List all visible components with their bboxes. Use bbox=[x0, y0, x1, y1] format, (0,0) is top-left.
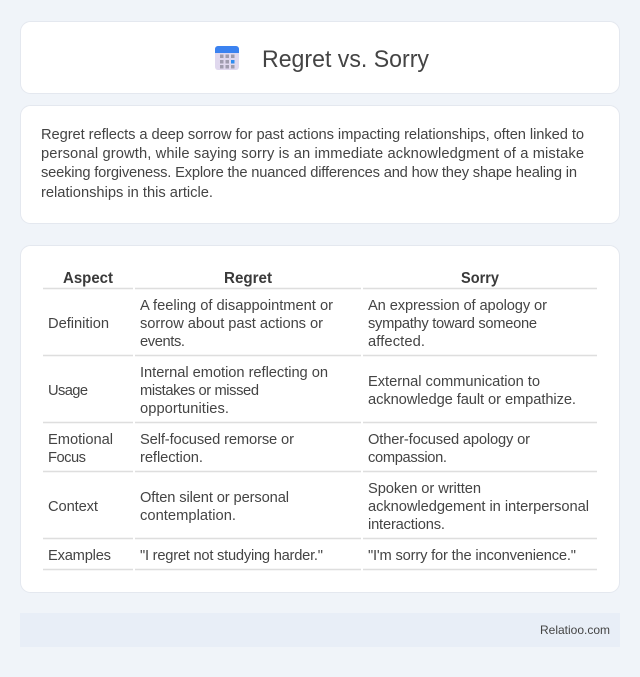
table row: definition: sympathy toward someone bbox=[368, 316, 537, 332]
table row: emotional focus: Focus bbox=[48, 450, 86, 466]
table row: context: interactions. bbox=[368, 517, 445, 533]
table row: definition: A feeling of disappointment or bbox=[140, 298, 333, 314]
table row: definition: sorrow about past actions or bbox=[140, 316, 323, 332]
table row: context: acknowledgement in interpersonal bbox=[368, 499, 589, 515]
table row: usage: opportunities. bbox=[140, 401, 229, 417]
table row: definition: Definition bbox=[48, 316, 109, 332]
panel: introduction bbox=[20, 106, 620, 224]
table row: context: Often silent or personal bbox=[140, 490, 289, 506]
table header row: Aspect bbox=[63, 270, 114, 287]
icon: calendar bbox=[215, 46, 239, 70]
table row: emotional focus: reflection. bbox=[140, 450, 203, 466]
text block: introduction bbox=[41, 127, 584, 201]
table row: definition: An expression of apology or bbox=[368, 298, 547, 314]
text block: introduction: Regret reflects a deep sorrow for past actions impacting relationships, often linked to bbox=[41, 127, 584, 143]
table row: emotional focus: Other-focused apology or bbox=[368, 432, 530, 448]
table row: emotional focus: compassion. bbox=[368, 450, 447, 466]
table row: context: contemplation. bbox=[140, 508, 236, 524]
table row: usage: Internal emotion reflecting on bbox=[140, 365, 328, 381]
text block: introduction: seeking forgiveness. Explore the nuanced differences and how they shape healing in bbox=[41, 165, 577, 181]
table row: examples: Examples bbox=[48, 548, 111, 564]
table row: examples bbox=[43, 548, 597, 570]
table row: emotional focus: Emotional bbox=[48, 432, 113, 448]
table row: usage: acknowledge fault or empathize. bbox=[368, 392, 576, 408]
panel: header bbox=[20, 22, 620, 94]
table header row: Sorry bbox=[461, 270, 499, 287]
table row: usage bbox=[43, 365, 597, 422]
table row: emotional focus: Self-focused remorse or bbox=[140, 432, 294, 448]
table header row bbox=[43, 270, 597, 288]
footer bbox=[20, 613, 620, 647]
table row: usage: External communication to bbox=[368, 374, 540, 390]
footer: Relatioo.com bbox=[540, 623, 610, 637]
table row: examples: "I'm sorry for the inconvenience." bbox=[368, 548, 576, 564]
table row: context: Context bbox=[48, 499, 98, 515]
text block: introduction: personal growth, while saying sorry is an immediate acknowledgment of a mistake bbox=[41, 146, 584, 162]
table row: usage: Usage bbox=[48, 383, 88, 399]
text block: introduction: relationships in this article. bbox=[41, 185, 213, 201]
table row: definition bbox=[43, 298, 597, 356]
table row: usage: mistakes or missed bbox=[140, 383, 259, 399]
panel: comparison table bbox=[20, 246, 620, 592]
title: Regret vs. Sorry bbox=[262, 46, 429, 73]
table header row: Regret bbox=[224, 270, 273, 287]
table row: definition: affected. bbox=[368, 334, 425, 350]
table row: examples: "I regret not studying harder." bbox=[140, 548, 323, 564]
table row: context: Spoken or written bbox=[368, 481, 481, 497]
table row: emotional focus bbox=[43, 432, 597, 472]
table row: definition: events. bbox=[140, 334, 185, 350]
table row: context bbox=[43, 481, 597, 538]
